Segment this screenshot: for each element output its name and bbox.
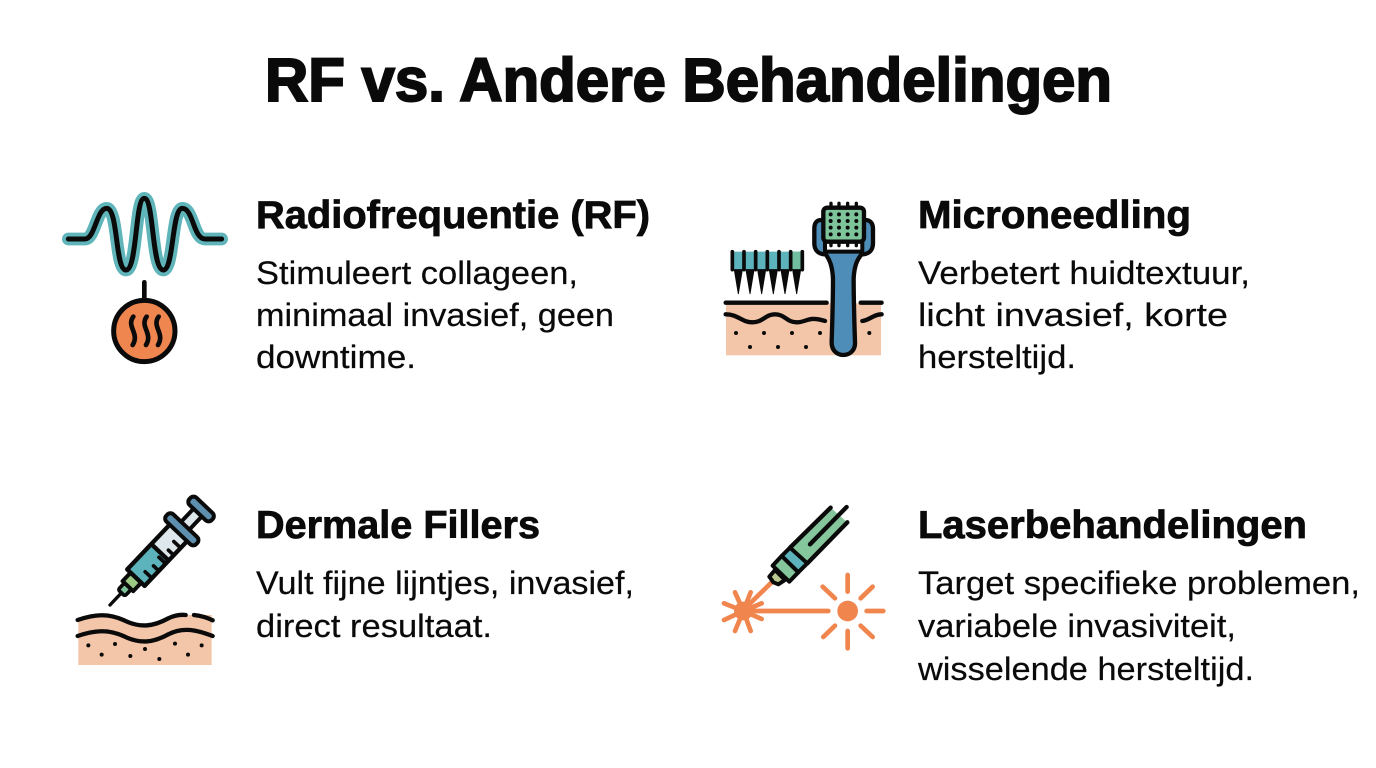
title: RF vs. Andere Behandelingen bbox=[265, 46, 1112, 114]
text: microneedling description: hersteltijd. bbox=[918, 339, 1076, 375]
text: radiofrequentie description: downtime. bbox=[256, 339, 416, 375]
heading: microneedling: Microneedling bbox=[918, 194, 1191, 237]
panel: radiofrequentie bbox=[68, 194, 650, 375]
text: dermale fillers description bbox=[256, 565, 634, 644]
icon: laser pen with beam bbox=[724, 507, 883, 648]
text: radiofrequentie description: minimaal invasief, geen bbox=[256, 297, 614, 333]
panel: microneedling bbox=[726, 194, 1250, 375]
panel: dermale fillers bbox=[78, 491, 634, 665]
text: microneedling description bbox=[918, 255, 1250, 375]
panel: laserbehandelingen bbox=[724, 504, 1360, 687]
text: dermale fillers description: Vult fijne lijntjes, invasief, bbox=[256, 565, 634, 601]
text: laserbehandelingen description: Target specifieke problemen, bbox=[918, 565, 1360, 601]
heading: radiofrequentie: Radiofrequentie (RF) bbox=[256, 194, 650, 237]
text: laserbehandelingen description bbox=[917, 565, 1360, 687]
text: radiofrequentie description: Stimuleert collageen, bbox=[256, 255, 578, 291]
text: laserbehandelingen description: wisselende hersteltijd. bbox=[917, 651, 1254, 687]
icon: derma roller on skin bbox=[726, 203, 882, 355]
heading: laserbehandelingen: Laserbehandelingen bbox=[918, 504, 1307, 547]
icon: syringe above skin bbox=[78, 491, 220, 665]
heading: dermale fillers: Dermale Fillers bbox=[256, 504, 540, 547]
text: microneedling description: licht invasief, korte bbox=[918, 297, 1228, 333]
text: dermale fillers description: direct resultaat. bbox=[256, 608, 492, 644]
text: laserbehandelingen description: variabele invasiviteit, bbox=[918, 608, 1236, 644]
icon: radio wave and heat bbox=[68, 198, 222, 362]
text: radiofrequentie description bbox=[256, 255, 614, 375]
text: microneedling description: Verbetert huidtextuur, bbox=[918, 255, 1250, 291]
